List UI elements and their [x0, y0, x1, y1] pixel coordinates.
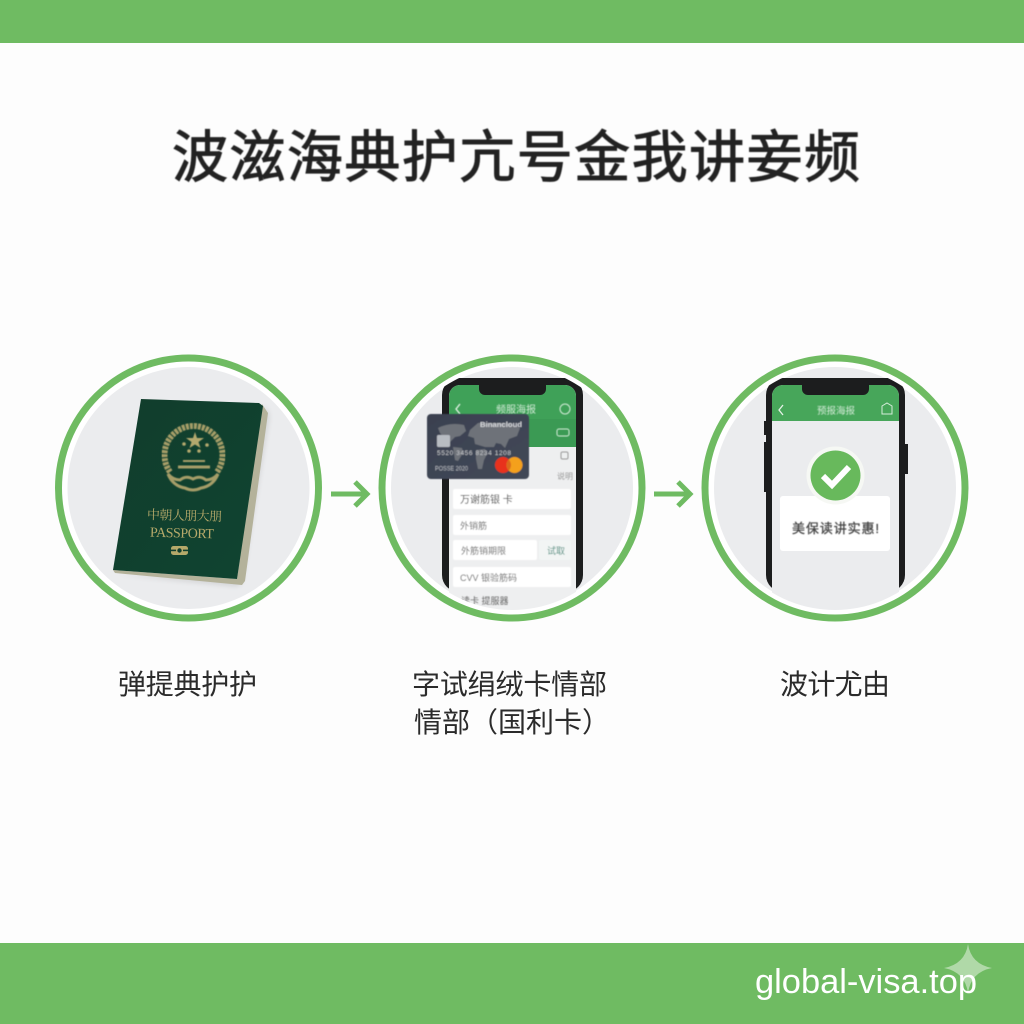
- form field: CVV: CVV 银验筋码: [460, 572, 517, 583]
- credit card: Binancloud: [480, 420, 522, 429]
- step 1: passport circle: [58, 358, 318, 618]
- step 3: success circle: [705, 358, 965, 635]
- icon: green passport: [113, 399, 269, 586]
- step 1 label: 弹提典护护: [118, 669, 257, 700]
- success check badge: [806, 446, 864, 504]
- message card: [780, 496, 890, 551]
- title: 波滋海典护亢号金我讲妾频: [172, 126, 860, 189]
- header button: [557, 429, 569, 436]
- small form icon: [561, 452, 568, 459]
- credit card: [427, 414, 529, 479]
- header title: 预报海报: [817, 405, 856, 417]
- header icon: [560, 404, 570, 414]
- step 2 label: 字试绢绒卡情部: [412, 669, 607, 700]
- footer field text: 读卡 提服器: [461, 595, 509, 606]
- phone with payment form: [427, 378, 583, 635]
- header title: 频服海报: [496, 403, 536, 416]
- biometric chip symbol: [171, 546, 188, 555]
- website footer text: global-visa.top: [755, 963, 977, 1001]
- step 3 label: 波计尤由: [780, 669, 890, 700]
- passport label: PASSPORT: [150, 526, 215, 542]
- form field: card name: [453, 489, 571, 509]
- form button: 试取: [547, 545, 565, 556]
- step 2 label: [412, 669, 610, 738]
- form field: expiry: [453, 540, 537, 560]
- step 2: card entry circle: [382, 358, 642, 635]
- credit card: 5520 3456 8234 1208: [437, 450, 511, 457]
- message card: 美保读讲实惠!: [792, 521, 879, 536]
- header icon: [882, 403, 892, 414]
- form field: card name: 万谢筋银 卡: [460, 493, 513, 506]
- form field: number: 外销筋: [460, 520, 487, 531]
- credit card: POSSE 2020: [435, 466, 469, 472]
- form field: number: [453, 515, 571, 535]
- step 2 label: 情部（国利卡）: [414, 707, 610, 738]
- right mini text: 说明: [557, 471, 573, 481]
- passport chinese text: 中朝人朋大朋: [147, 507, 222, 524]
- back chevron: [779, 405, 783, 415]
- top green band: [0, 0, 1024, 43]
- form field: CVV: [453, 567, 571, 587]
- back chevron: [456, 404, 460, 414]
- bottom green band: [0, 943, 1024, 1024]
- arrow 2: [654, 482, 690, 506]
- arrow 1: [331, 482, 367, 506]
- notch: [479, 385, 546, 395]
- phone with success message: [764, 378, 908, 635]
- emblem: [164, 426, 223, 490]
- form field: expiry: 外筋销期限: [461, 545, 506, 556]
- notch: [802, 385, 869, 395]
- sparkle icon: [944, 944, 992, 993]
